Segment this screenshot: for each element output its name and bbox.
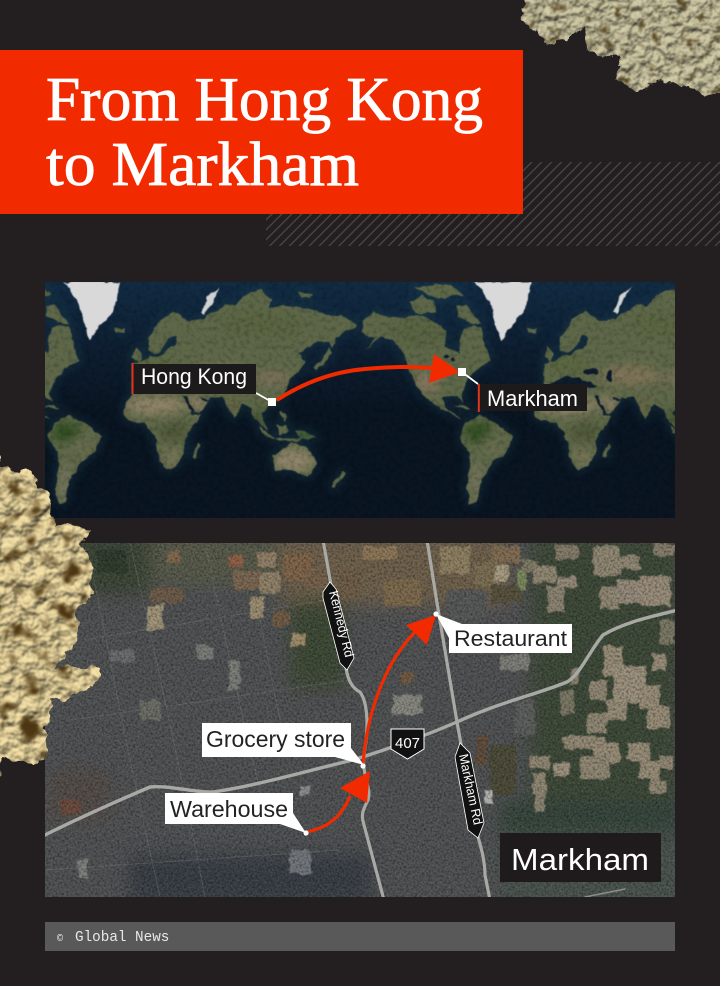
- location marker: Markham: [458, 368, 478, 384]
- footer credit bar: Global News: [75, 930, 169, 946]
- roads: [45, 540, 678, 900]
- panel: Markham satellite map: [40, 535, 680, 910]
- route arrow: warehouse to grocery store: [307, 771, 370, 832]
- panel: world map: [45, 282, 675, 518]
- location marker: Hong Kong: [256, 393, 276, 406]
- footer credit bar: [45, 922, 675, 951]
- title banner: [0, 50, 523, 214]
- label: Grocery store: Grocery store: [206, 726, 345, 752]
- label: Markham area: [500, 833, 661, 882]
- map land masses: [45, 282, 675, 506]
- highway shield: 407: [391, 729, 424, 759]
- highway shield: 407: 407: [395, 735, 420, 752]
- route arrow: grocery store to restaurant: [363, 615, 436, 765]
- powder texture: left side: [0, 450, 100, 777]
- satellite grain: [45, 543, 675, 897]
- road sign: Kennedy Rd: Kennedy Rd: [326, 589, 357, 659]
- label: Restaurant: [433, 611, 572, 653]
- footer credit bar: ©: [57, 933, 63, 945]
- road sign: Markham Rd: Markham Rd: [456, 753, 486, 826]
- label: Hong Kong: Hong Kong: [141, 364, 247, 389]
- title text: From Hong Kong: [46, 66, 483, 134]
- label: Warehouse: Warehouse: [170, 796, 288, 822]
- land cover: [40, 535, 680, 910]
- label: Markham area: Markham: [511, 842, 649, 877]
- label: Grocery store: [202, 723, 366, 769]
- route arrow: Hong Kong to Markham: [277, 354, 460, 400]
- arterial street grid: [45, 543, 350, 897]
- title text: to Markham: [46, 131, 359, 199]
- label: Markham on world map: Markham: [487, 386, 578, 411]
- hatched band behind title: [266, 162, 720, 246]
- label: Warehouse: [165, 793, 309, 836]
- label: Restaurant: Restaurant: [454, 626, 567, 651]
- farm fields: [60, 543, 675, 878]
- powder texture: top right: [522, 0, 720, 95]
